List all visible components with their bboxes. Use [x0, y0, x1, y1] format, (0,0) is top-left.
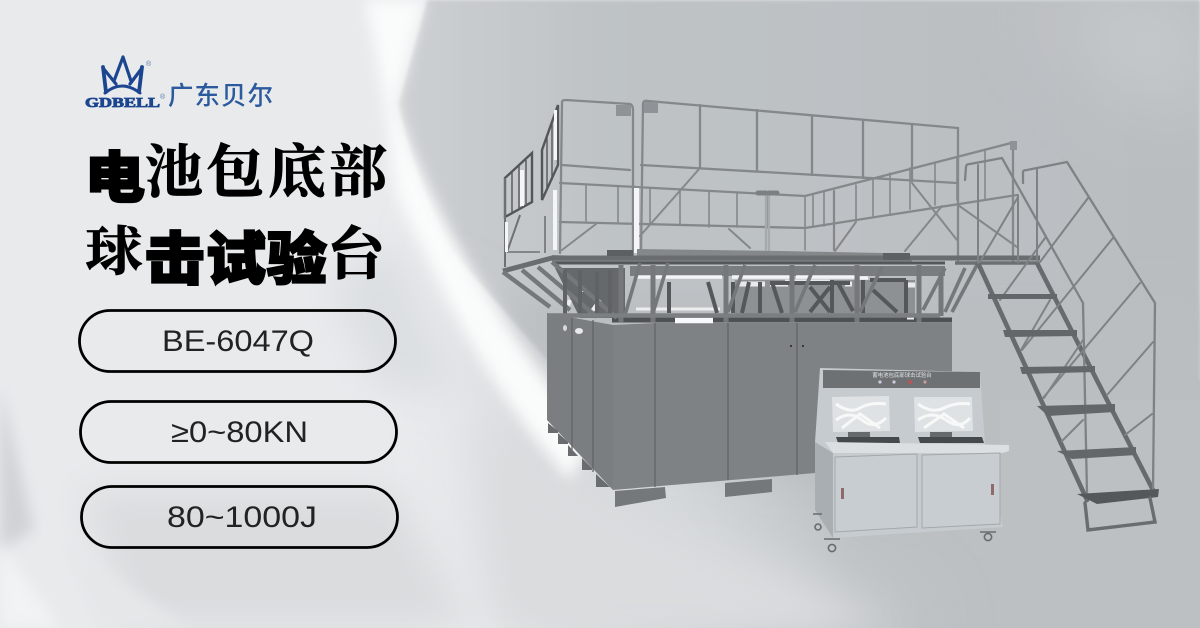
dark struts — [669, 280, 906, 313]
main verticals — [621, 265, 941, 322]
icon: crown — [103, 57, 142, 93]
console body — [815, 368, 1003, 538]
keyboards — [836, 437, 984, 443]
title: line 1: 包 — [206, 140, 264, 205]
highlights — [505, 110, 639, 253]
test rig illustration — [503, 100, 1159, 552]
upper beam — [630, 266, 945, 276]
handrails and braces — [965, 158, 1155, 493]
casters — [813, 514, 996, 552]
deck and truss — [503, 249, 1040, 322]
left cantilever braces — [503, 262, 617, 318]
monitors — [832, 396, 973, 437]
title: line 2: 台 — [327, 222, 387, 287]
title: line 2: 球 — [85, 223, 143, 282]
upper safety railing — [560, 100, 1017, 262]
pill: model: BE-6047Q — [162, 325, 314, 358]
stair treads — [988, 294, 1159, 504]
title: line 1 — [85, 140, 387, 209]
staircase — [965, 158, 1159, 530]
title: line 1: 底 — [268, 140, 326, 205]
control console — [813, 368, 1009, 552]
door handles — [841, 484, 994, 499]
title: line 1: 电 — [85, 148, 145, 209]
enclosure front — [613, 323, 952, 490]
deck top slab — [637, 249, 912, 262]
equipment on deck — [607, 250, 910, 260]
title: line 2: 击 — [145, 228, 205, 292]
indicator lights — [878, 380, 927, 384]
console label: 蓄电池包底部球击试验台 — [872, 371, 932, 379]
left railing panels — [505, 105, 558, 267]
main diagonals — [625, 263, 978, 315]
registered mark top: ® — [146, 60, 152, 68]
bottom gap — [612, 318, 952, 322]
pill: force range: ≥0~80KN — [171, 416, 308, 449]
pill: energy range — [82, 486, 398, 548]
pill: model — [80, 310, 396, 372]
title: line 2 — [85, 222, 387, 292]
bottom chord — [548, 313, 940, 318]
dense left frame — [555, 268, 625, 318]
title: line 2: 试 — [206, 228, 266, 292]
registered mark bottom: ® — [160, 93, 166, 101]
slab and top chord — [503, 258, 1040, 271]
console counter — [825, 442, 1009, 453]
dense right frame — [735, 280, 915, 314]
enclosure side — [547, 313, 613, 490]
console header — [823, 370, 980, 388]
title: line 1: 池 — [145, 140, 203, 205]
stair stringers — [978, 263, 1153, 500]
logo wordmark: GDBELL — [85, 95, 160, 110]
cabinet doors — [835, 453, 1000, 532]
stair base frame — [1085, 498, 1155, 530]
title: line 1: 部 — [329, 140, 387, 205]
title: line 2: 验 — [267, 228, 327, 292]
pill: force range — [80, 402, 396, 462]
white gaps — [636, 277, 868, 278]
pill: energy range: 80~1000J — [167, 501, 317, 534]
logo: GDBELL — [85, 57, 274, 110]
mounting plates — [616, 102, 1017, 150]
enclosure seams and feet — [548, 316, 804, 507]
logo Chinese name: 广东贝尔 — [168, 82, 274, 110]
